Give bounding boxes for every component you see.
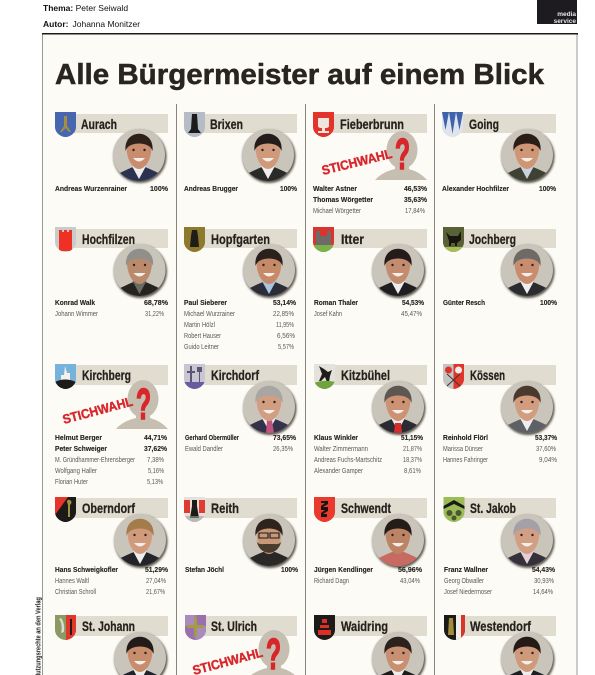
panel: Kössen: 53,37%	[535, 433, 557, 442]
panel: Kirchberg: Wolfgang Haller	[55, 466, 97, 475]
panel: Itter: 45,47%	[401, 309, 422, 318]
panel: Going	[442, 112, 556, 193]
silhouette: unknown mayor	[247, 630, 299, 675]
icon: Kirchberg crest	[55, 364, 76, 389]
panel: Kössen: Kössen	[470, 367, 505, 383]
panel: Fieberbrunn: 17,84%	[405, 206, 425, 215]
panel: Hopfgarten	[184, 227, 297, 351]
silhouette: unknown mayor	[116, 380, 168, 429]
panel: Kirchberg: Florian Huter	[55, 477, 88, 486]
panel: Schwendt	[314, 497, 427, 585]
panel: Jochberg: Günter Resch	[443, 298, 485, 307]
panel: Kirchdorf	[184, 364, 297, 453]
icon: question mark: ?	[395, 130, 410, 179]
icon: St. Ulrich crest	[185, 615, 206, 640]
panel: Brixen: Andreas Brugger	[184, 184, 238, 193]
panel: Oberndorf: 27,04%	[146, 576, 166, 585]
panel: Westendorf: Westendorf	[470, 618, 531, 634]
panel: Brixen	[184, 112, 297, 193]
panel: Schwendt: 56,96%	[398, 565, 422, 574]
panel: Hochfilzen: Johann Wimmer	[55, 309, 98, 318]
icon: question mark: ?	[136, 380, 151, 429]
panel: Hochfilzen: Konrad Walk	[55, 298, 96, 307]
panel: Kitzbühel: Andreas Fuchs-Martschitz	[314, 455, 382, 464]
photo: Waidring mayor	[371, 632, 426, 675]
panel: Itter: Itter	[341, 231, 364, 247]
panel: St. Ulrich	[185, 615, 299, 675]
panel: St. Jakob: 54,43%	[532, 565, 555, 574]
panel: Kitzbühel: 21,87%	[403, 444, 422, 453]
label: Stichwahl: STICHWAHL	[61, 394, 134, 427]
panel: Going: Going	[469, 116, 499, 132]
panel: Westendorf	[444, 615, 556, 675]
photo: Andreas Brugger	[241, 129, 296, 183]
photo: Stefan Jöchl	[242, 514, 296, 568]
panel: Kössen: Reinhold Flörl	[443, 433, 488, 442]
panel: Hopfgarten: 22,85%	[273, 309, 294, 318]
panel: Schwendt: Richard Dagn	[314, 576, 349, 585]
panel: Kitzbühel: Klaus Winkler	[314, 433, 358, 442]
header: author line: Autor:	[43, 19, 69, 29]
panel: Itter: Roman Thaler	[314, 298, 358, 307]
panel: Hopfgarten: 11,95%	[276, 320, 294, 329]
photo: Reinhold Flörl	[500, 381, 554, 435]
panel: Hopfgarten: 5,57%	[278, 342, 294, 351]
panel: Kirchberg: Kirchberg	[82, 367, 131, 383]
panel: Reith: Reith	[211, 500, 239, 516]
panel: Kitzbühel: 8,61%	[404, 466, 421, 475]
icon: Going crest	[442, 112, 463, 137]
photo: Westendorf mayor	[500, 632, 554, 675]
panel: St. Jakob: 30,93%	[534, 576, 554, 585]
panel: Kirchberg: M. Gründhammer-Ehrensberger	[55, 455, 135, 464]
silhouette: unknown mayor	[375, 131, 427, 180]
panel: Kössen: Hannes Fahringer	[443, 455, 488, 464]
panel: Kitzbühel: Walter Zimmermann	[314, 444, 368, 453]
panel: Aurach	[55, 112, 168, 193]
panel: Oberndorf	[55, 497, 168, 596]
panel: Reith: Stefan Jöchl	[185, 565, 224, 574]
panel: Hopfgarten: Guido Leitner	[184, 342, 219, 351]
panel: Oberndorf: Hans Schweigkofler	[55, 565, 118, 574]
panel: Jochberg: 100%	[540, 298, 557, 307]
icon: Aurach crest	[55, 112, 76, 137]
panel: St. Jakob: 14,64%	[533, 587, 553, 596]
panel: Hochfilzen: Hochfilzen	[82, 231, 135, 247]
panel: St. Johann: St. Johann	[82, 618, 135, 634]
panel: Kirchberg: 5,13%	[147, 477, 163, 486]
logo: media service: service	[554, 18, 576, 25]
panel: Fieberbrunn: Walter Astner	[313, 184, 357, 193]
panel: Kitzbühel: Alexander Gamper	[314, 466, 363, 475]
panel: Waidring	[314, 615, 427, 675]
panel: Hopfgarten: 6,56%	[277, 331, 295, 340]
vertical copyright note: Nutzungsrechte an den Verlag	[36, 597, 42, 675]
panel: Kirchdorf: 26,35%	[273, 444, 293, 453]
panel: Hopfgarten: Michael Wurzrainer	[184, 309, 235, 318]
panel: St. Jakob	[444, 497, 556, 596]
panel: Hopfgarten: Paul Sieberer	[184, 298, 227, 307]
panel: Fieberbrunn: Fieberbrunn	[340, 116, 404, 132]
panel: St. Jakob: Georg Obwaller	[444, 576, 484, 585]
panel: St. Jakob: Franz Wallner	[444, 565, 488, 574]
panel: Kössen: Marissa Dünser	[443, 444, 483, 453]
panel: Waidring: Waidring	[341, 618, 388, 634]
header: topic line: Thema: Peter Seiwald	[43, 3, 128, 13]
panel: Hopfgarten: Martin Hölzl	[184, 320, 215, 329]
panel: Kitzbühel: 18,37%	[403, 455, 422, 464]
panel: Kirchberg: Peter Schweiger	[55, 444, 107, 453]
panel: Itter: Josef Kahn	[314, 309, 342, 318]
panel: Kirchberg: 37,62%	[144, 444, 167, 453]
photo: Konrad Walk	[112, 244, 167, 298]
panel: Aurach: Andreas Wurzenrainer	[55, 184, 127, 193]
panel: Kirchberg: Helmut Berger	[55, 433, 102, 442]
title: Alle Bürgermeister auf einem Blick	[55, 59, 545, 91]
panel: Fieberbrunn: 35,63%	[404, 195, 427, 204]
panel: St. Ulrich: St. Ulrich	[211, 618, 257, 634]
panel: Hopfgarten: Hopfgarten	[211, 231, 270, 247]
photo: Günter Resch	[500, 244, 554, 298]
icon: Hopfgarten crest	[184, 227, 205, 252]
panel: Oberndorf: Christian Schroll	[55, 587, 96, 596]
panel: St. Jakob: Josef Niedermoser	[444, 587, 492, 596]
label: Stichwahl: STICHWAHL	[320, 146, 394, 178]
photo: Hans Schweigkofler	[113, 514, 168, 568]
logo: media service: media	[557, 11, 576, 18]
icon: Oberndorf crest	[55, 497, 76, 522]
panel: Aurach: Aurach	[81, 116, 117, 132]
photo: Andreas Wurzenrainer	[112, 129, 166, 183]
panel: Itter	[313, 227, 427, 318]
panel: Kirchdorf: 73,65%	[273, 433, 296, 442]
panel: Schwendt: 43,04%	[400, 576, 420, 585]
panel: Hochfilzen: 31,22%	[145, 309, 164, 318]
panel: Kitzbühel	[314, 364, 427, 475]
panel: Kirchdorf: Gerhard Obermüller	[185, 433, 239, 442]
photo: Paul Sieberer	[242, 244, 296, 298]
photo: Gerhard Obermüller	[242, 381, 296, 435]
panel: Kössen: 9,04%	[539, 455, 557, 464]
icon: Hochfilzen crest	[55, 227, 76, 252]
panel: Going: Alexander Hochfilzer	[442, 184, 509, 193]
panel: Kirchberg: 5,16%	[148, 466, 164, 475]
panel: Hochfilzen	[55, 227, 168, 318]
panel: Jochberg	[443, 227, 557, 307]
panel: St. Johann	[55, 615, 168, 675]
icon: Waidring crest	[314, 615, 335, 640]
icon: St. Johann crest	[55, 615, 76, 640]
panel: Fieberbrunn: Michael Wörgetter	[313, 206, 361, 215]
photo: Klaus Winkler	[371, 381, 426, 435]
icon: Jochberg crest	[443, 227, 464, 252]
panel: Oberndorf: Hannes Waltl	[55, 576, 89, 585]
panel: Kössen: 37,60%	[536, 444, 556, 453]
photo: Roman Thaler	[371, 244, 426, 298]
panel: Kirchberg: 44,71%	[144, 433, 167, 442]
photo: St. Johann mayor	[113, 632, 168, 675]
panel: Kitzbühel: 51,15%	[401, 433, 423, 442]
panel: Hopfgarten: 53,14%	[273, 298, 296, 307]
panel: Hopfgarten: Robert Hauser	[184, 331, 221, 340]
panel: Itter: 54,53%	[402, 298, 424, 307]
panel: Kitzbühel: Kitzbühel	[341, 367, 390, 383]
panel: Fieberbrunn: 46,53%	[404, 184, 427, 193]
icon: Itter crest	[313, 227, 334, 252]
panel: Reith	[184, 497, 298, 574]
icon: Westendorf crest	[444, 615, 465, 640]
panel: Oberndorf: 51,29%	[145, 565, 168, 574]
panel: Fieberbrunn	[313, 112, 427, 215]
panel: Kössen	[443, 364, 557, 464]
icon: St. Jakob crest	[444, 497, 464, 522]
panel: Brixen: Brixen	[210, 116, 243, 132]
panel: Fieberbrunn: Thomas Wörgetter	[313, 195, 373, 204]
panel: Jochberg: Jochberg	[469, 231, 516, 247]
panel: Aurach: 100%	[150, 184, 168, 193]
icon: Kirchdorf crest	[184, 364, 205, 389]
panel: St. Jakob: St. Jakob	[470, 500, 516, 516]
panel: Kirchberg	[55, 364, 168, 486]
panel: Brixen: 100%	[280, 184, 297, 193]
icon: Schwendt crest	[314, 497, 335, 522]
panel: Kirchberg: 7,38%	[147, 455, 164, 464]
panel: Oberndorf: Oberndorf	[82, 500, 135, 516]
icon: Kössen crest	[443, 364, 464, 389]
panel: Hochfilzen: 68,78%	[144, 298, 168, 307]
panel: Kirchdorf: Kirchdorf	[211, 367, 259, 383]
icon: Reith crest	[184, 497, 205, 522]
photo: Jürgen Kendlinger	[371, 514, 426, 568]
panel: Going: 100%	[539, 184, 556, 193]
panel: Schwendt: Schwendt	[341, 500, 391, 516]
icon: Brixen crest	[184, 112, 205, 137]
header: author line: Johanna Monitzer	[72, 19, 140, 29]
icon: Fieberbrunn crest	[313, 112, 334, 137]
panel: Oberndorf: 21,67%	[146, 587, 165, 596]
logo: media service	[537, 0, 577, 25]
photo: Franz Wallner	[500, 514, 554, 568]
photo: Alexander Hochfilzer	[500, 129, 554, 183]
icon: Kitzbühel crest	[314, 364, 335, 389]
panel: Schwendt: Jürgen Kendlinger	[314, 565, 373, 574]
panel: Kirchdorf: Ewald Dandler	[185, 444, 223, 453]
panel: Reith: 100%	[281, 565, 298, 574]
